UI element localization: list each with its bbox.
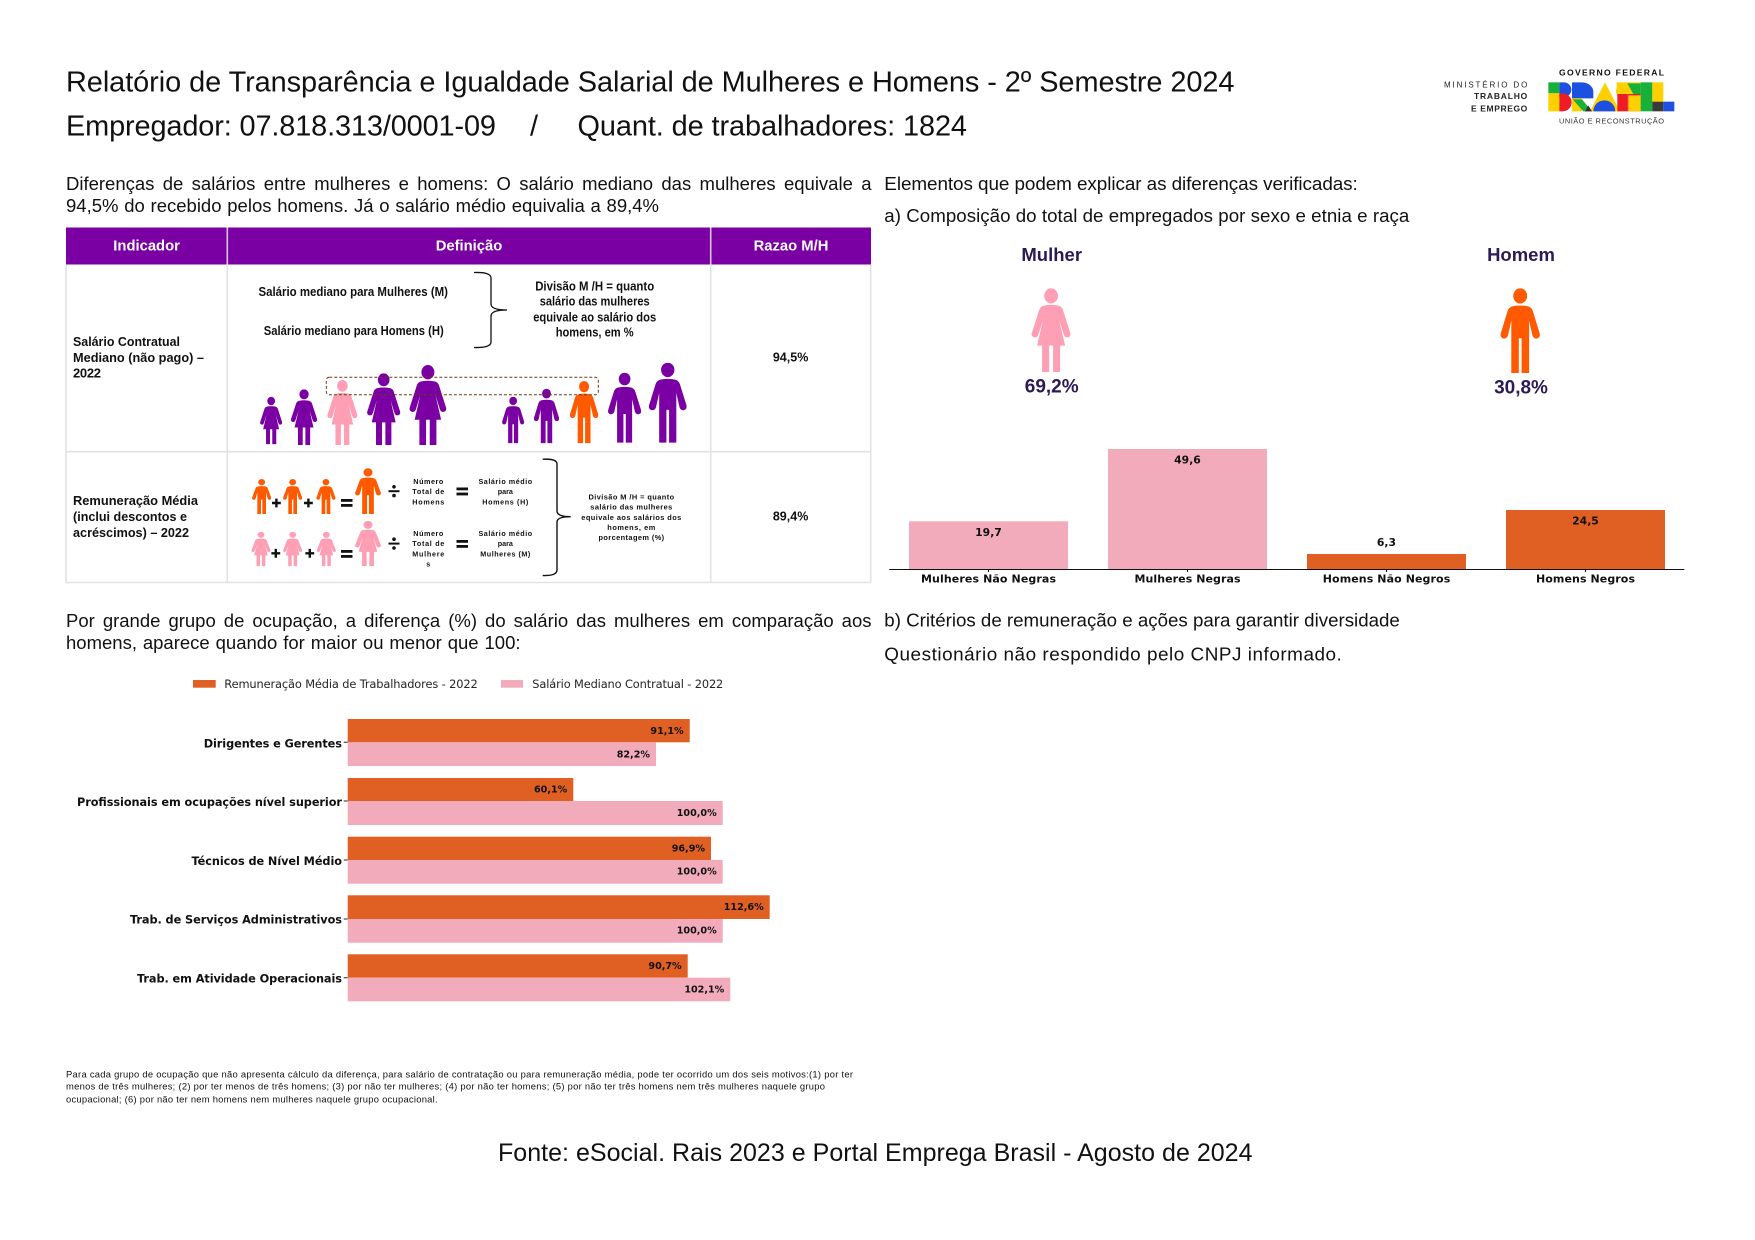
table header: Indicador xyxy=(113,239,180,255)
subtitle: employer and workers: / xyxy=(530,111,539,143)
footnote: ocupacional; (6) por não ter nem homens nem mulheres naquele grupo ocupacional. xyxy=(66,1093,438,1104)
bar: mulheres não negras xyxy=(909,521,1068,585)
logo: Ministério do Trabalho e Governo Federal: TRABALHO xyxy=(1474,91,1528,101)
title: Relatório de Transparência e Igualdade Salarial de Mulheres e Homens - 2º Semestre 2024 xyxy=(66,67,1234,99)
group: profissionais xyxy=(77,778,723,825)
bar: mulheres negras xyxy=(1108,449,1267,585)
table header xyxy=(66,228,871,264)
definition: salário mediano xyxy=(258,285,448,338)
source: Fonte: eSocial. Rais 2023 e Portal Emprega Brasil - Agosto de 2024 xyxy=(498,1139,1253,1167)
division text: média: Divisão M /H = quanto xyxy=(588,492,675,502)
equation: men: Número xyxy=(413,477,444,486)
group: técnicos: 100,0% xyxy=(677,867,717,878)
group: dirigentes e gerentes: Dirigentes e Gerentes xyxy=(204,737,342,750)
equation: men: Salário médio xyxy=(478,477,533,486)
group: profissionais: Profissionais em ocupações nível superior xyxy=(77,796,342,809)
row 1 value: 94,5% xyxy=(773,351,808,365)
brace: mediano xyxy=(474,272,507,348)
row 1 label: salário contratual mediano: Mediano (não pago) – xyxy=(73,350,204,365)
row 2 value: 89,4% xyxy=(773,510,808,524)
questionnaire note: Questionário não respondido pelo CNPJ informado. xyxy=(884,645,1342,666)
equation: men: Total de xyxy=(412,487,444,496)
footnote: Para cada grupo de ocupação que não apresenta cálculo da diferença, para salário de contratação ou para remuneração média, pode ter ocorrido um dos seis motivos:(1) por ter xyxy=(66,1069,853,1080)
equation: women: para xyxy=(498,539,514,548)
table header: Definição xyxy=(436,239,502,255)
definition: salário mediano: Salário mediano para Homens (H) xyxy=(264,324,444,338)
group: serviços administrativos: Trab. de Serviços Administrativos xyxy=(130,914,342,927)
group: profissionais: 60,1% xyxy=(534,785,568,796)
bar: mulheres negras: Mulheres Negras xyxy=(1134,572,1241,585)
division text: média xyxy=(581,492,681,542)
bar chart: composition by sex and race xyxy=(889,449,1684,585)
bar: mulheres não negras: Mulheres Não Negras xyxy=(921,572,1056,585)
bar chart: difference by occupation group xyxy=(77,719,770,1001)
group: atividade operacionais: 90,7% xyxy=(648,961,682,972)
row 2 label: remuneração média: (inclui descontos e xyxy=(73,509,187,524)
group: atividade operacionais: Trab. em Atividade Operacionais xyxy=(137,972,342,986)
legend xyxy=(193,677,723,691)
row 1 label: salário contratual mediano xyxy=(73,334,204,380)
group: atividade operacionais: 102,1% xyxy=(684,984,725,995)
right column heading: elementos: Elementos que podem explicar as diferenças verificadas: xyxy=(884,174,1358,195)
bar: homens não negros: 6,3 xyxy=(1377,536,1396,549)
gender block: homem: Homem xyxy=(1487,244,1555,265)
footnote xyxy=(66,1069,853,1104)
paragraph: salary differences: Diferenças de salários entre mulheres e homens: O salário mediano das mulheres equivale a xyxy=(66,172,872,194)
paragraph: salary differences: 94,5% do recebido pelos homens. Já o salário médio equivalia a 89,4% xyxy=(66,194,659,216)
table xyxy=(66,228,871,582)
logo: Ministério do Trabalho e Governo Federal xyxy=(1444,68,1674,125)
dashed median box xyxy=(326,377,598,395)
group: técnicos xyxy=(192,837,723,884)
group: técnicos: Técnicos de Nível Médio xyxy=(192,855,342,868)
paragraph: salary differences xyxy=(66,172,872,216)
bar: mulheres não negras: 19,7 xyxy=(975,526,1002,539)
icons: women in ascending salary order xyxy=(260,365,446,445)
subtitle: employer and workers xyxy=(66,111,967,143)
division text: média: salário das mulheres xyxy=(590,503,672,512)
equation: women: Número xyxy=(413,529,444,538)
bar: homens negros: Homens Negros xyxy=(1536,572,1635,585)
division text: mediano xyxy=(533,280,656,340)
equation: women xyxy=(251,521,533,568)
equation: men: Homens xyxy=(412,497,444,506)
gender block: mulher xyxy=(1021,244,1082,398)
group: serviços administrativos: 112,6% xyxy=(724,902,764,913)
table header: Razao M/H xyxy=(754,239,828,255)
division text: mediano: equivale ao salário dos xyxy=(533,310,656,324)
gender block: homem: 30,8% xyxy=(1494,377,1548,398)
legend: Remuneração Média de Trabalhadores - 2022 xyxy=(224,677,478,691)
subtitle: employer and workers: Quant. de trabalhadores: 1824 xyxy=(578,111,967,143)
equation: men: Homens (H) xyxy=(482,497,529,506)
paragraph: occupation groups: Por grande grupo de ocupação, a diferença (%) do salário das mulheres em comparação aos xyxy=(66,610,872,631)
group: profissionais: 100,0% xyxy=(677,808,717,819)
group: serviços administrativos xyxy=(130,895,770,943)
equation: women: Mulheres (M) xyxy=(480,549,531,558)
equation: women: Mulhere xyxy=(412,549,444,558)
logo: Ministério do Trabalho e Governo Federal: UNIÃO E RECONSTRUÇÃO xyxy=(1559,116,1664,125)
equation: men xyxy=(252,468,533,514)
group: dirigentes e gerentes xyxy=(204,719,690,766)
gender block: mulher: Mulher xyxy=(1021,244,1082,265)
group: dirigentes e gerentes: 91,1% xyxy=(650,726,684,737)
bar: mulheres negras: 49,6 xyxy=(1174,453,1201,466)
group: serviços administrativos: 100,0% xyxy=(677,926,717,936)
row 1 label: salário contratual mediano: Salário Contratual xyxy=(73,334,180,349)
gender block: homem xyxy=(1487,244,1555,398)
row 2 label: remuneração média: Remuneração Média xyxy=(73,493,199,508)
right column subheading b: b) Critérios de remuneração e ações para garantir diversidade xyxy=(884,610,1400,631)
legend: Salário Mediano Contratual - 2022 xyxy=(532,677,723,691)
group: atividade operacionais xyxy=(137,954,730,1001)
equation: women: Total de xyxy=(412,539,444,548)
division text: média: porcentagem (%) xyxy=(598,533,665,542)
division text: média: homens, em xyxy=(607,523,656,532)
division text: mediano: homens, em % xyxy=(556,326,634,340)
row 2 label: remuneração média xyxy=(73,493,199,540)
bar: homens não negros xyxy=(1307,536,1466,585)
row 2 label: remuneração média: acréscimos) – 2022 xyxy=(73,525,189,540)
brace: média xyxy=(543,459,571,576)
subtitle: employer and workers: Empregador: 07.818.313/0001-09 xyxy=(66,111,496,143)
equation: women: Salário médio xyxy=(478,529,533,538)
bar: homens negros: 24,5 xyxy=(1572,514,1599,527)
row 1 label: salário contratual mediano: 2022 xyxy=(73,366,101,380)
footnote: menos de três mulheres; (2) por ter menos de três homens; (3) por não ter mulheres; (4) por não ter homens; (5) por não ter três homens nem três mulheres naquele grupo xyxy=(66,1081,825,1092)
logo: Ministério do Trabalho e Governo Federal: MINISTÉRIO DO xyxy=(1444,81,1527,90)
definition: salário mediano: Salário mediano para Mulheres (M) xyxy=(258,285,448,299)
group: técnicos: 96,9% xyxy=(672,843,705,854)
equation: women: s xyxy=(426,559,430,568)
group: dirigentes e gerentes: 82,2% xyxy=(617,749,650,760)
right column subheading a: a) Composição do total de empregados por sexo e etnia e raça xyxy=(884,205,1410,226)
division text: mediano: salário das mulheres xyxy=(540,295,650,309)
equation: men: para xyxy=(498,487,514,496)
paragraph: occupation groups xyxy=(66,610,872,653)
gender block: mulher: 69,2% xyxy=(1025,377,1079,398)
paragraph: occupation groups: homens, aparece quando for maior ou menor que 100: xyxy=(66,632,520,653)
logo: Ministério do Trabalho e Governo Federal: GOVERNO FEDERAL xyxy=(1559,68,1664,78)
bar: homens não negros: Homens Não Negros xyxy=(1323,572,1451,585)
icons: men in ascending salary order xyxy=(502,363,687,443)
division text: mediano: Divisão M /H = quanto xyxy=(535,280,655,294)
logo: Ministério do Trabalho e Governo Federal: E EMPREGO xyxy=(1471,103,1528,113)
bar: homens negros xyxy=(1506,510,1665,585)
division text: média: equivale aos salários dos xyxy=(581,513,681,522)
